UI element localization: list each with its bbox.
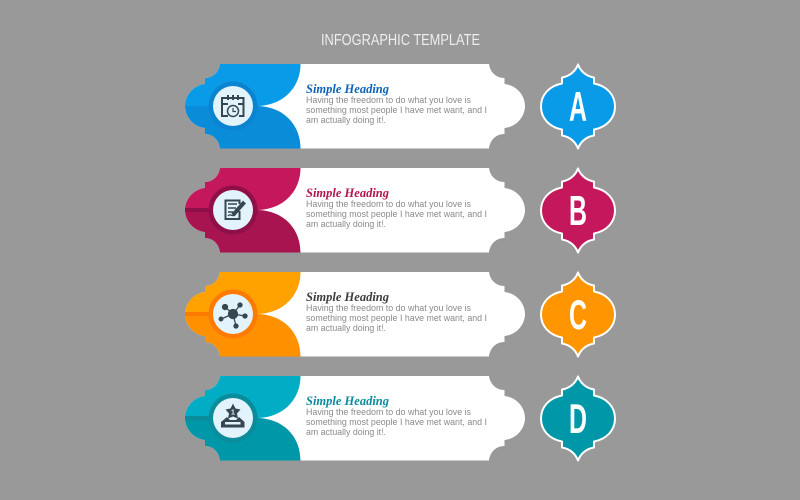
panel: row C <box>185 272 615 356</box>
heading A: Simple Heading <box>306 81 389 96</box>
body text B: something most people I have met want, and I <box>306 209 487 219</box>
badge C: C <box>569 291 587 338</box>
body text B <box>306 199 487 229</box>
body text B: am actually doing it!. <box>306 219 386 229</box>
panel: row A <box>185 64 615 148</box>
badge A: A <box>569 83 587 130</box>
icon: star award box: 1 <box>231 410 235 416</box>
body text A: am actually doing it!. <box>306 115 386 125</box>
body text D: Having the freedom to do what you love is <box>306 407 471 417</box>
panel: row D <box>185 376 615 460</box>
icon: calendar with clock <box>208 82 258 130</box>
badge C <box>541 272 615 356</box>
icon: network nodes <box>208 290 258 338</box>
card B <box>185 168 525 252</box>
colored tab B <box>185 168 300 252</box>
body text C: am actually doing it!. <box>306 323 386 333</box>
badge A <box>541 64 615 148</box>
body text C <box>306 303 487 333</box>
panel: row B <box>185 168 615 252</box>
icon: star award box <box>208 394 258 442</box>
heading D: Simple Heading <box>306 393 389 408</box>
body text C: Having the freedom to do what you love is <box>306 303 471 313</box>
badge D <box>541 376 615 460</box>
card C <box>185 272 525 356</box>
heading B: Simple Heading <box>306 185 389 200</box>
badge B <box>541 168 615 252</box>
body text A: Having the freedom to do what you love is <box>306 95 471 105</box>
body text D: something most people I have met want, and I <box>306 417 487 427</box>
body text A <box>306 95 487 125</box>
heading C: Simple Heading <box>306 289 389 304</box>
badge B: B <box>569 187 587 234</box>
card A <box>185 64 525 148</box>
body text D: am actually doing it!. <box>306 427 386 437</box>
card D <box>185 376 525 460</box>
body text A: something most people I have met want, and I <box>306 105 487 115</box>
title: INFOGRAPHIC TEMPLATE <box>321 32 480 49</box>
badge D: D <box>569 395 587 442</box>
colored tab D <box>185 376 300 460</box>
body text C: something most people I have met want, and I <box>306 313 487 323</box>
body text B: Having the freedom to do what you love is <box>306 199 471 209</box>
colored tab C <box>185 272 300 356</box>
colored tab A <box>185 64 300 148</box>
icon: document with pen <box>208 186 258 234</box>
body text D <box>306 407 487 437</box>
